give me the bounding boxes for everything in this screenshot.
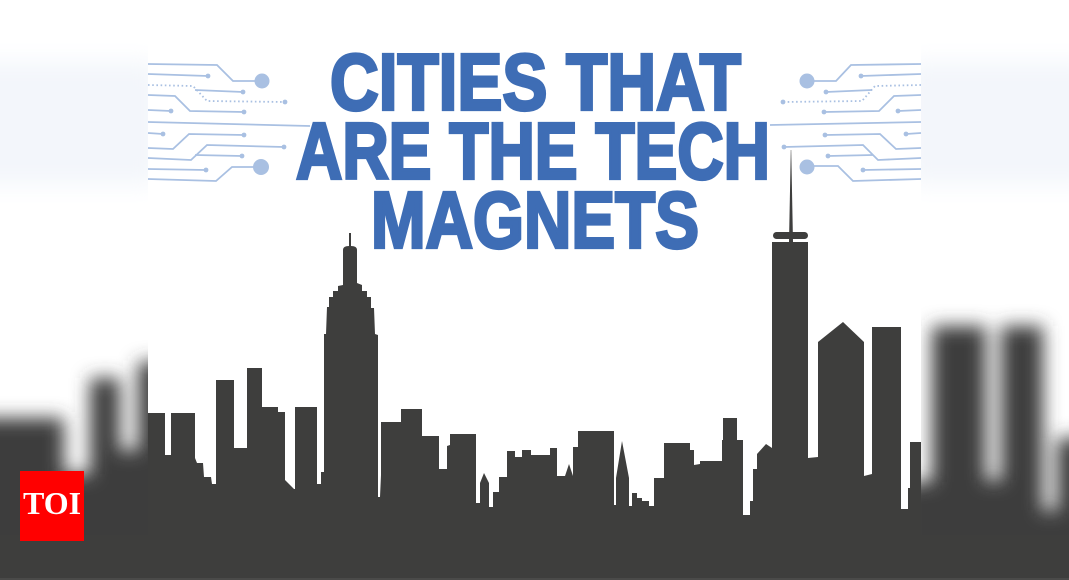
spire cap — [773, 232, 808, 239]
circuit lines: left — [148, 64, 310, 181]
blurred left backdrop — [0, 68, 148, 578]
TOI logo: TOI — [23, 485, 81, 521]
TOI logo — [20, 471, 84, 541]
title — [296, 38, 770, 264]
blurred right backdrop — [921, 68, 1069, 578]
title: CITIES THAT — [330, 38, 741, 126]
city skyline silhouette — [148, 150, 921, 580]
title: ARE THE TECH — [296, 106, 770, 196]
spire — [789, 150, 793, 242]
circuit lines: right — [770, 64, 921, 181]
bottom edge band — [0, 578, 1069, 580]
central white panel — [148, 0, 921, 580]
title: MAGNETS — [371, 176, 699, 264]
